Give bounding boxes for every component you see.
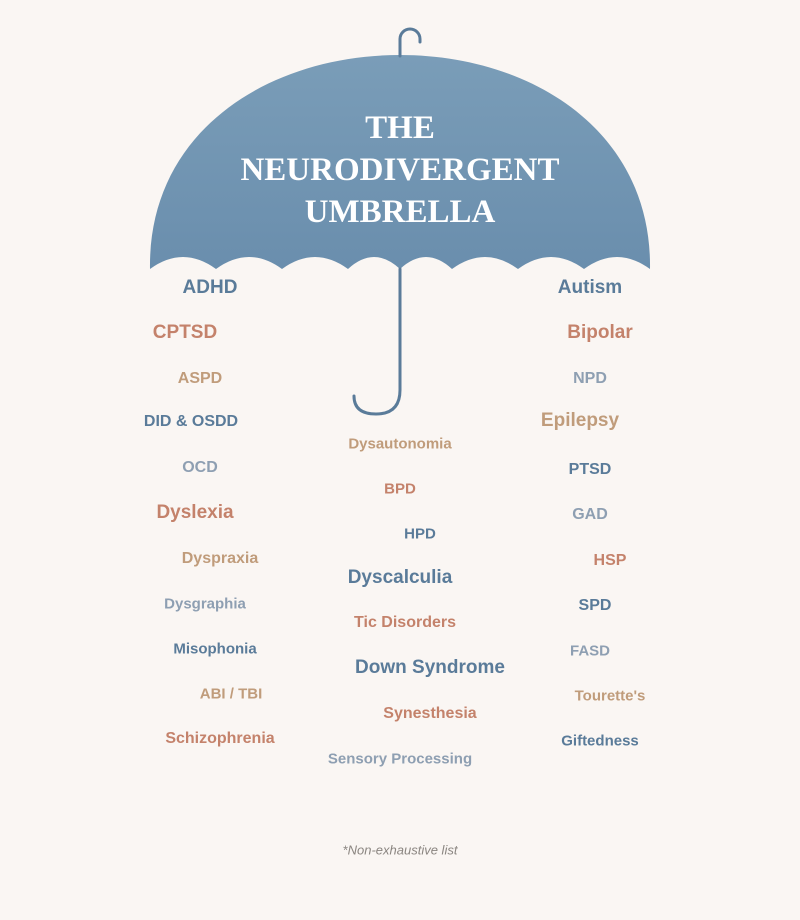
- umbrella: [150, 28, 650, 416]
- text: DID & OSDD: [144, 413, 238, 430]
- text: Tic Disorders: [354, 614, 456, 631]
- text: Dysautonomia: [348, 436, 452, 452]
- left column: [144, 277, 275, 747]
- text: HPD: [404, 526, 436, 542]
- text: ADHD: [183, 277, 237, 298]
- title: THE: [365, 110, 435, 146]
- title: NEURODIVERGENT: [240, 152, 560, 188]
- canopy: [150, 55, 650, 269]
- text: OCD: [182, 459, 218, 476]
- text: Autism: [558, 277, 622, 298]
- text: CPTSD: [153, 322, 217, 343]
- text: Giftedness: [561, 732, 639, 750]
- text: GAD: [572, 506, 608, 523]
- text: Epilepsy: [541, 410, 619, 431]
- text: SPD: [579, 597, 611, 614]
- text: Down Syndrome: [355, 657, 505, 678]
- text: BPD: [384, 480, 416, 498]
- text: Dyslexia: [156, 502, 234, 523]
- middle column: [328, 436, 505, 768]
- text: HSP: [594, 552, 626, 569]
- text: FASD: [570, 642, 610, 660]
- text: Dyspraxia: [182, 550, 258, 567]
- text: Dysgraphia: [164, 596, 246, 612]
- right column: [541, 277, 645, 750]
- text: Sensory Processing: [328, 750, 472, 768]
- text: NPD: [573, 370, 607, 387]
- text: Misophonia: [173, 640, 257, 658]
- text: ABI / TBI: [200, 686, 262, 702]
- text: PTSD: [569, 461, 611, 478]
- handle: [354, 29, 420, 414]
- text: ASPD: [178, 370, 222, 387]
- text: Synesthesia: [383, 705, 477, 722]
- text: Tourette's: [575, 688, 645, 704]
- title: UMBRELLA: [305, 194, 496, 230]
- text: Dyscalculia: [348, 567, 452, 588]
- title: [240, 110, 560, 230]
- footnote: *Non-exhaustive list: [343, 842, 457, 858]
- text: Schizophrenia: [165, 730, 275, 747]
- text: Bipolar: [567, 322, 633, 343]
